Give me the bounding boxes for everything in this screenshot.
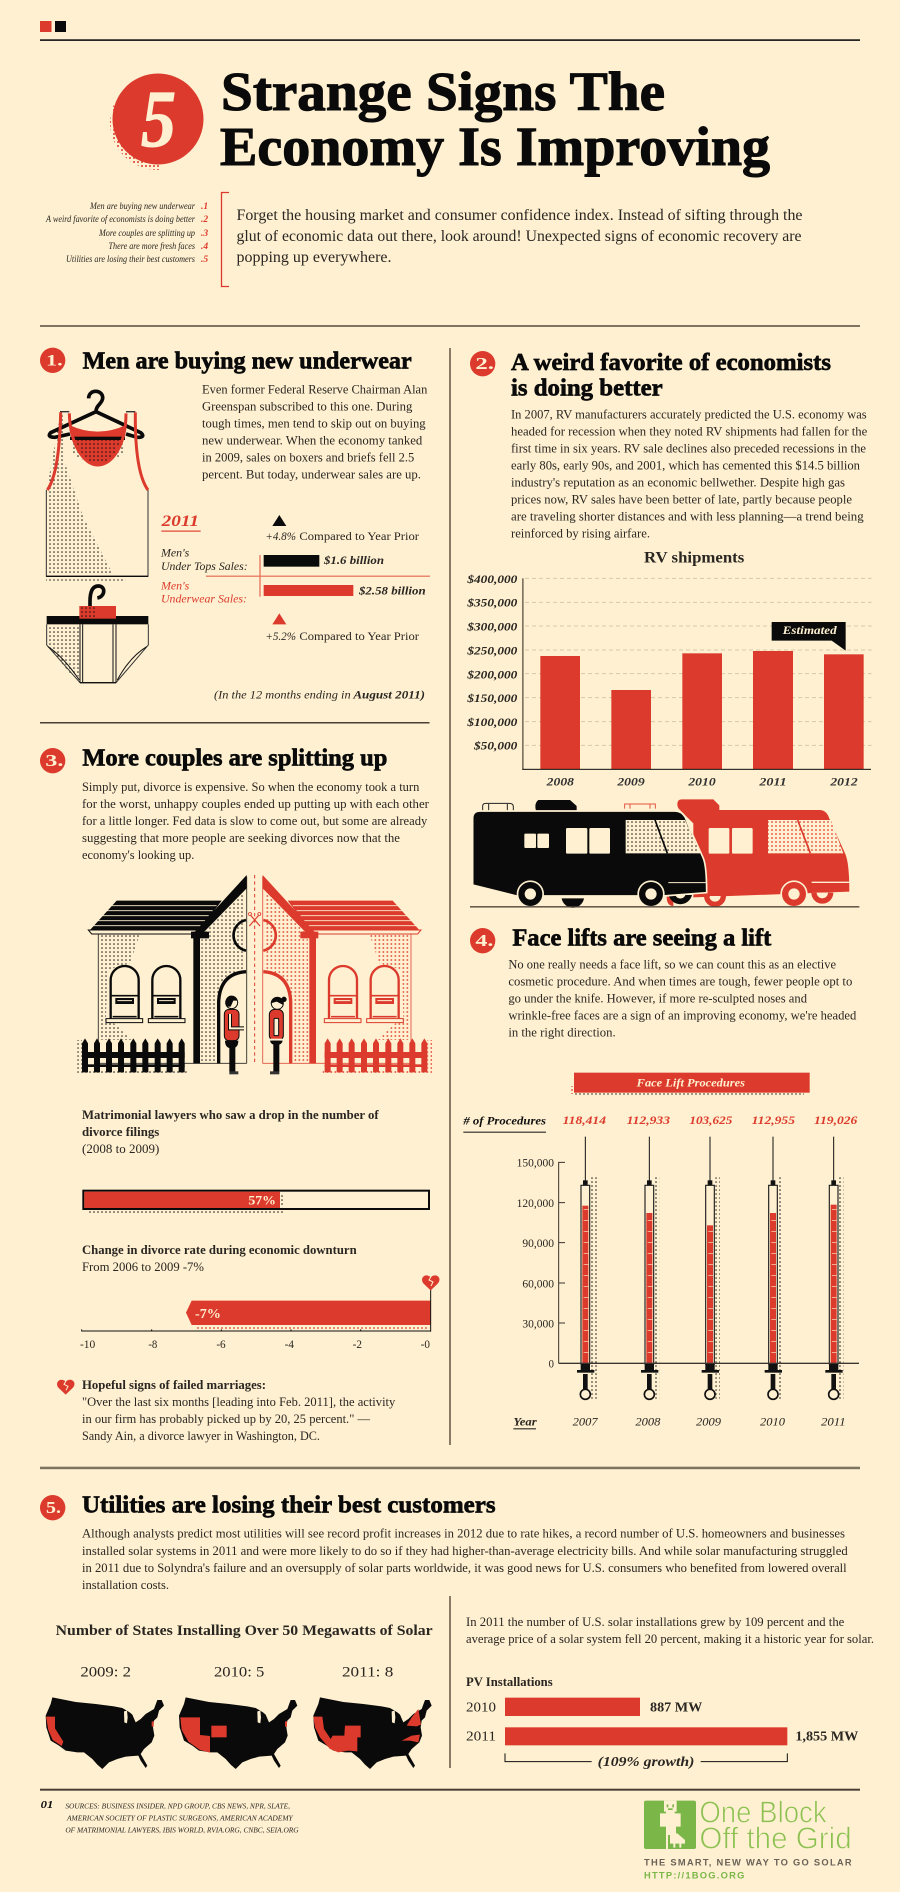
text block 1: Greenspan subscribed to this one. During xyxy=(202,399,412,413)
text block 3: for a little longer. Fed data is slow to come out, but some are already xyxy=(82,814,428,828)
chart: 2011 sales: 2011 xyxy=(160,513,199,530)
table of contents: .2 xyxy=(201,215,208,225)
row: years: Year xyxy=(513,1414,537,1428)
text block 2: industry's reputation as an economic bellwether. Despite high gas xyxy=(511,475,845,489)
bar chart: RV shipments: 2008 xyxy=(546,774,574,788)
bar chart: RV shipments: 2012 xyxy=(829,774,858,788)
axis xyxy=(517,1156,565,1370)
bar chart: PV installations xyxy=(466,1675,859,1769)
icon: right half of house xyxy=(263,875,432,1073)
badge: number five xyxy=(110,73,204,170)
bar chart: divorce rate change: -8 xyxy=(148,1339,158,1351)
bar chart: RV shipments: $300,000 xyxy=(466,620,517,634)
badge: number five: 5 xyxy=(141,73,176,164)
text block 4: wrinkle-free faces are a sign of an improving economy, we're headed xyxy=(508,1008,857,1022)
axis: 150,000 xyxy=(517,1156,554,1170)
table of contents: Men are buying new underwear xyxy=(89,202,195,212)
text block 1: Even former Federal Reserve Chairman Alan xyxy=(202,382,427,396)
header squares xyxy=(40,21,66,32)
icon: red RV xyxy=(625,799,849,908)
panel: PV installations xyxy=(466,1615,874,1769)
text block 1: tough times, men tend to skip out on buying xyxy=(202,416,426,430)
chart title: Number of States Installing Over 50 Megawatts of Solar xyxy=(56,1623,433,1639)
text block 3: Simply put, divorce is expensive. So when the economy took a turn xyxy=(82,780,419,794)
chart: 2011 sales: Underwear Sales: xyxy=(161,592,247,606)
chart: 2011 sales: (In the 12 months ending in xyxy=(214,687,351,701)
chart: 2011 sales: +4.8% xyxy=(265,529,296,543)
panel: section 3 divorce xyxy=(40,745,432,1074)
bar chart: divorce rate change: -10 xyxy=(80,1339,96,1351)
quote xyxy=(82,1378,396,1443)
text block 5: installed solar systems in 2011 and were more likely to do so if they had higher-than-average electricity bills. And while solar manufacturing struggled xyxy=(82,1544,848,1558)
text block 2: reinforced by rising airfare. xyxy=(511,526,650,540)
chart: 2011 sales: Under Tops Sales: xyxy=(161,559,248,573)
heading 2: is doing better xyxy=(511,375,663,402)
text block 2 xyxy=(511,407,868,540)
row: number of procedures: # of Procedures xyxy=(462,1114,546,1128)
icon: left half of house xyxy=(77,875,247,1073)
row: years: 2010 xyxy=(760,1414,785,1428)
syringe 2008 xyxy=(641,1137,659,1399)
heading: divorce rate: Change in divorce rate during economic downturn xyxy=(82,1243,357,1257)
bar chart: RV shipments: $200,000 xyxy=(466,667,517,681)
chart: 2011 sales: Men's xyxy=(160,546,190,560)
text block xyxy=(466,1615,874,1646)
bar chart: RV shipments: $50,000 xyxy=(473,739,517,753)
footer xyxy=(41,1800,299,1835)
heading: lawyers stat: (2008 to 2009) xyxy=(82,1142,159,1156)
text block 4 xyxy=(508,957,857,1039)
sources xyxy=(65,1801,299,1835)
map 2011: 2011: 8 xyxy=(342,1665,393,1681)
progress bar 57% xyxy=(83,1191,429,1213)
title xyxy=(220,61,770,177)
row: years: 2007 xyxy=(573,1414,599,1428)
bar chart: RV shipments: 2011 xyxy=(758,774,787,788)
text block 4: in the right direction. xyxy=(508,1025,616,1039)
quote: Sandy Ain, a divorce lawyer in Washington, DC. xyxy=(82,1429,320,1443)
text block 3 xyxy=(82,780,429,862)
text block 5: installation costs. xyxy=(82,1578,169,1592)
row: number of procedures: 119,026 xyxy=(814,1113,857,1127)
syringe 2009 xyxy=(702,1137,720,1399)
number badge 1 xyxy=(40,348,65,373)
intro text: glut of economic data out there, look around! Unexpected signs of economic recovery are xyxy=(236,228,802,245)
text block 5 xyxy=(82,1527,848,1592)
quote: in our firm has probably picked up by 20, 25 percent." — xyxy=(82,1412,371,1426)
quote: "Over the last six months [leading into Feb. 2011], the activity xyxy=(82,1395,396,1409)
row: years xyxy=(513,1414,846,1429)
text block 1: percent. But today, underwear sales are up. xyxy=(202,467,421,481)
banner: Face Lift Procedures xyxy=(636,1076,745,1090)
sources: SOURCES: BUSINESS INSIDER, NPD GROUP, CBS NEWS, NPR, SLATE, xyxy=(65,1801,290,1810)
row: number of procedures: 118,414 xyxy=(563,1113,606,1127)
title: Economy Is Improving xyxy=(220,116,770,177)
table of contents: A weird favorite of economists is doing better xyxy=(45,214,195,225)
bar chart: RV shipments: 2009 xyxy=(616,774,645,788)
panel: RV illustration and section 4 xyxy=(470,799,859,1039)
bar chart: RV shipments: RV shipments xyxy=(644,549,744,566)
axis: 90,000 xyxy=(522,1236,554,1250)
icon: black RV xyxy=(473,800,707,908)
map 2009: 2009: 2 xyxy=(80,1665,131,1681)
progress bar 57%: 57% xyxy=(248,1193,276,1207)
icon: woman xyxy=(269,997,287,1074)
table of contents: .1 xyxy=(201,202,208,212)
axis: 30,000 xyxy=(522,1316,554,1330)
logo wordmark: One Block xyxy=(699,1796,827,1830)
logo url: HTTP://1BOG.ORG xyxy=(644,1870,744,1880)
bar chart: RV shipments xyxy=(466,549,872,788)
text block 2: prices now, RV sales have been better of late, partly because people xyxy=(511,492,853,506)
syringe 2011 xyxy=(825,1137,844,1399)
panel: divorce charts xyxy=(57,1108,439,1443)
icon: broken heart on axis xyxy=(422,1275,439,1290)
red bracket xyxy=(222,192,229,286)
heading 1: Men are buying new underwear xyxy=(83,347,412,374)
text block 2: first time in six years. RV sale declines also preceded recessions in the xyxy=(511,441,867,455)
bar chart: RV shipments: $100,000 xyxy=(466,715,517,729)
bar chart: RV shipments: 2010 xyxy=(687,774,716,788)
chart: 2011 sales: Compared to Year Prior xyxy=(299,629,419,643)
sources: OF MATRIMONIAL LAWYERS, IBIS WORLD, RVIA.ORG, CNBC, SEIA.ORG xyxy=(65,1826,299,1835)
logo mark xyxy=(644,1801,696,1849)
icon: man xyxy=(224,996,244,1074)
bar chart: PV installations: 1,855 MW xyxy=(795,1729,859,1744)
map 2010 xyxy=(179,1665,297,1769)
text block: average price of a solar system fell 20 percent, making it a historic year for solar. xyxy=(466,1632,874,1646)
syringe 2007 xyxy=(577,1137,599,1399)
bar chart: RV shipments: Estimated xyxy=(782,623,838,637)
text block 4: go under the knife. However, if more re-sculpted noses and xyxy=(508,991,808,1005)
map 2011 xyxy=(313,1665,432,1769)
text block 1 xyxy=(202,382,427,481)
text block 1: new underwear. When the economy tanked xyxy=(202,433,423,447)
heading 4: Face lifts are seeing a lift xyxy=(512,925,772,952)
chart: 2011 sales: August 2011) xyxy=(352,687,425,701)
sources: AMERICAN SOCIETY OF PLASTIC SURGEONS, AMERICAN ACADEMY xyxy=(66,1814,294,1823)
bar chart: divorce rate change xyxy=(80,1288,431,1351)
panel: section 1 underwear xyxy=(40,347,430,701)
text block 4: No one really needs a face lift, so we can count this as an elective xyxy=(508,957,837,971)
chart: 2011 sales xyxy=(160,513,430,701)
text block 2: are traveling shorter distances and with less planning—a trend being xyxy=(511,509,864,523)
bar chart: PV installations: PV Installations xyxy=(466,1675,553,1689)
page number: 01 xyxy=(41,1800,53,1811)
table of contents: Utilities are losing their best customers xyxy=(66,255,195,265)
axis: 60,000 xyxy=(522,1276,554,1290)
bar chart: PV installations: 2011 xyxy=(466,1729,496,1744)
number badge 4 xyxy=(470,928,495,953)
text block 3: economy's looking up. xyxy=(82,848,194,862)
intro text: Forget the housing market and consumer confidence index. Instead of sifting through the xyxy=(236,207,803,224)
text block 4: cosmetic procedure. And when times are tough, fewer people opt to xyxy=(508,974,852,988)
chart: 2011 sales: +5.2% xyxy=(265,629,296,643)
table of contents xyxy=(45,202,208,265)
table of contents: More couples are splitting up xyxy=(98,229,195,239)
title: Strange Signs The xyxy=(221,61,665,122)
bar chart: PV installations: 887 MW xyxy=(650,1700,703,1715)
text block 2: In 2007, RV manufacturers accurately predicted the U.S. economy was xyxy=(511,407,867,421)
intro text xyxy=(236,207,803,266)
heading 2: A weird favorite of economists xyxy=(511,349,831,376)
text block 3: suggesting that more people are seeking divorces now that the xyxy=(82,831,401,845)
icon: tank top on hanger xyxy=(46,391,148,581)
heading 2 xyxy=(511,349,831,402)
table of contents: .4 xyxy=(201,242,208,252)
heading 5: Utilities are losing their best customers xyxy=(82,1492,496,1519)
number badge 5 xyxy=(40,1495,65,1520)
number badge 3: 3. xyxy=(45,751,63,770)
chart: 2011 sales: $1.6 billion xyxy=(323,553,384,567)
map 2009 xyxy=(46,1665,164,1769)
number badge 2: 2. xyxy=(475,354,494,373)
axis: 120,000 xyxy=(517,1196,554,1210)
text block 5: in 2011 due to Solyndra's failure and an oversupply of solar parts worldwide, it was good news for U.S. consumers who benefited from lowered overall xyxy=(82,1561,847,1575)
number badge 3 xyxy=(40,748,65,773)
row: years: 2008 xyxy=(635,1414,660,1428)
row: number of procedures: 112,955 xyxy=(752,1113,795,1127)
heading: lawyers stat: Matrimonial lawyers who saw a drop in the number of xyxy=(82,1108,380,1122)
axis: 0 xyxy=(549,1356,554,1370)
table of contents: There are more fresh faces xyxy=(108,241,195,252)
logo wordmark: Off the Grid xyxy=(699,1822,852,1856)
row: number of procedures xyxy=(462,1113,857,1133)
number badge 2 xyxy=(470,351,495,376)
icon: broken heart xyxy=(57,1380,74,1395)
panel: section 2 RV xyxy=(466,349,872,788)
bar chart: RV shipments: $400,000 xyxy=(466,572,517,586)
number badge 1: 1. xyxy=(46,353,63,370)
bar chart: PV installations: (109% growth) xyxy=(598,1754,694,1769)
text block 3: for the worst, unhappy couples ended up putting up with each other xyxy=(82,797,429,811)
syringe 2010 xyxy=(765,1137,783,1399)
text block 5: Although analysts predict most utilities will see record profit increases in 2012 due to rate hikes, a record number of U.S. homeowners and businesses xyxy=(82,1527,845,1541)
chart: 2011 sales: Compared to Year Prior xyxy=(299,529,419,543)
bar chart: divorce rate change: -0 xyxy=(421,1339,430,1351)
panel: face lift chart xyxy=(462,1073,859,1429)
icon: briefs on hanger xyxy=(47,586,148,683)
heading: lawyers stat: divorce filings xyxy=(82,1125,160,1139)
panel: solar maps xyxy=(46,1623,433,1769)
bar chart: divorce rate change: -6 xyxy=(216,1339,226,1351)
chart: 2011 sales: Men's xyxy=(160,578,190,592)
bar chart: divorce rate change: -4 xyxy=(285,1339,294,1351)
icon: scissors and cut line xyxy=(248,875,261,1063)
number badge 4: 4. xyxy=(475,931,493,950)
text block 1: in 2009, sales on boxers and briefs fell 2.5 xyxy=(202,450,414,464)
heading: divorce rate xyxy=(82,1243,357,1274)
text block 2: early 80s, early 90s, and 2001, which has cemented this $14.5 billion xyxy=(511,458,860,472)
table of contents: .5 xyxy=(201,255,208,265)
bar chart: RV shipments: $250,000 xyxy=(466,643,517,657)
row: number of procedures: 112,933 xyxy=(627,1113,670,1127)
row: number of procedures: 103,625 xyxy=(689,1113,732,1127)
number badge 5: 5. xyxy=(46,1498,61,1517)
bar chart: RV shipments: $350,000 xyxy=(466,596,517,610)
logo tagline: THE SMART, NEW WAY TO GO SOLAR xyxy=(644,1857,852,1867)
chart: 2011 sales: $2.58 billion xyxy=(358,583,426,597)
panel: section 5 heading xyxy=(40,1492,848,1592)
quote: Hopeful signs of failed marriages: xyxy=(82,1378,266,1392)
heading: divorce rate: From 2006 to 2009 -7% xyxy=(82,1260,204,1274)
map 2010: 2010: 5 xyxy=(214,1665,264,1681)
row: years: 2011 xyxy=(821,1414,846,1428)
bar chart: PV installations: 2010 xyxy=(466,1700,496,1715)
text block 2: headed for recession when they noted RV shipments had fallen for the xyxy=(511,424,868,438)
banner xyxy=(570,1073,810,1095)
logo wordmark xyxy=(699,1796,852,1856)
heading 3: More couples are splitting up xyxy=(82,745,387,772)
bar chart: divorce rate change: -2 xyxy=(353,1339,362,1351)
table of contents: .3 xyxy=(201,229,208,239)
bar chart: RV shipments: $150,000 xyxy=(466,691,517,705)
heading: lawyers stat xyxy=(82,1108,380,1156)
bar chart: divorce rate change: -7% xyxy=(195,1307,221,1322)
intro text: popping up everywhere. xyxy=(236,249,392,266)
row: years: 2009 xyxy=(696,1414,721,1428)
text block: In 2011 the number of U.S. solar installations grew by 109 percent and the xyxy=(466,1615,845,1629)
logo: One Block Off the Grid xyxy=(644,1796,852,1880)
